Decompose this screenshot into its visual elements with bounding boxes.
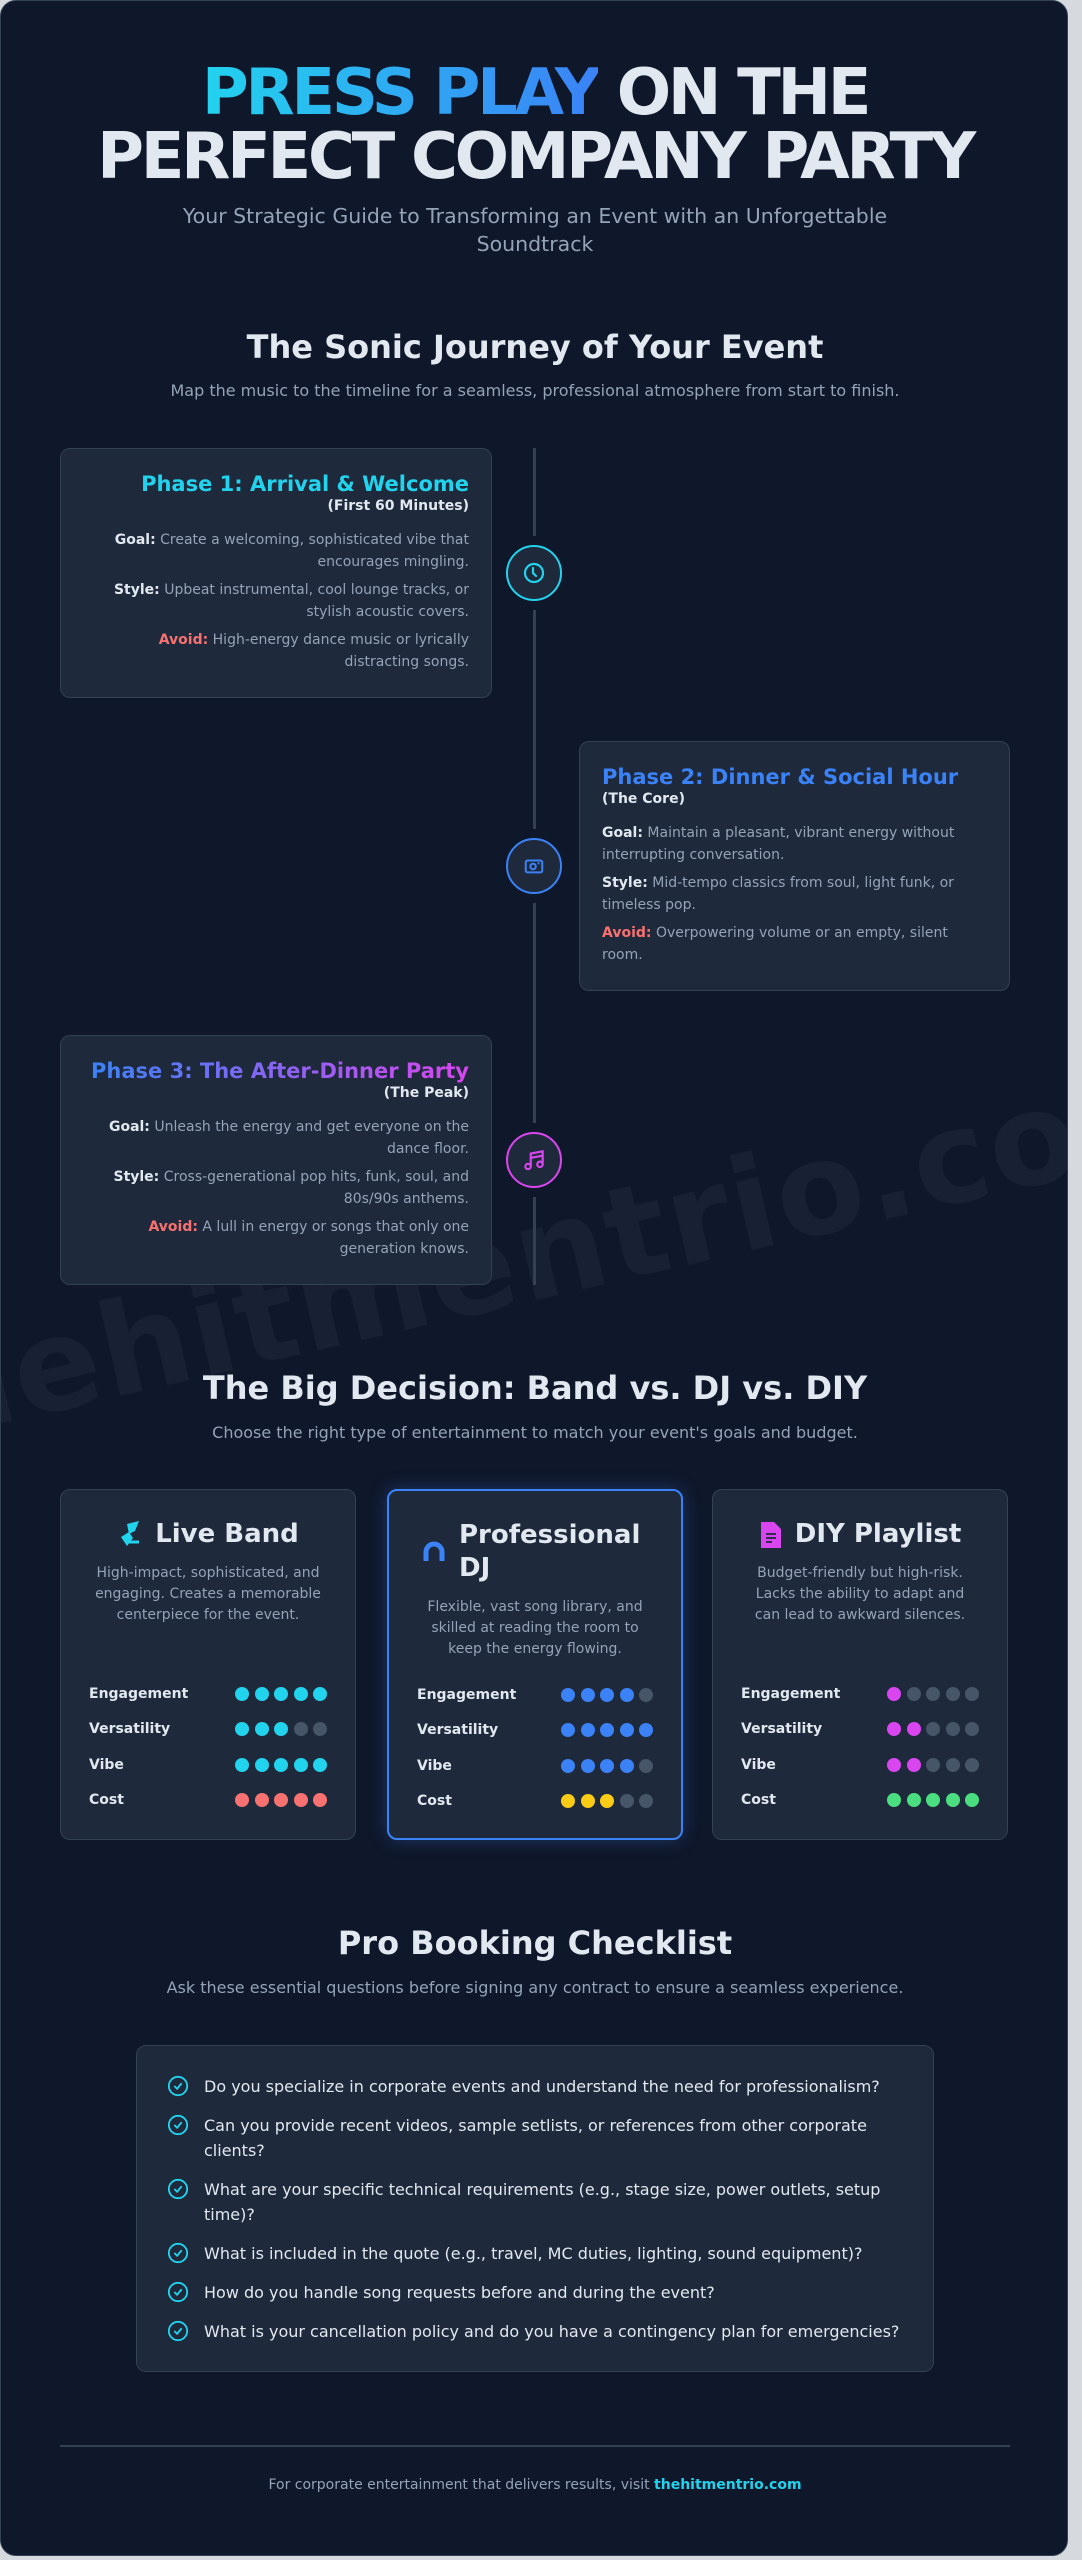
heading: big decision: The Big Decision: Band vs. DJ vs. DIY (203, 1369, 867, 1407)
ratings: live band: Cost (89, 1792, 124, 1808)
panel: checklist: Do you specialize in corporate events and understand the need for professionalism? (204, 2077, 880, 2096)
ratings: diy: Engagement (741, 1686, 840, 1702)
panel: phase 3: Style: Cross-generational pop hits, funk, soul, and 80s/90s anthems. (113, 1169, 469, 1207)
icon: camera (506, 838, 562, 894)
panel: checklist: What are your specific technical requirements (e.g., stage size, power outlets, setup time)? (204, 2180, 880, 2224)
icon: music note (506, 1132, 562, 1188)
ratings: live band: Versatility (89, 1721, 170, 1737)
panel: phase 1: Goal: Create a welcoming, sophisticated vibe that encourages mingling. (115, 532, 469, 570)
footer: For corporate entertainment that delivers results, visit thehitmentrio.com (268, 2477, 802, 2493)
panel: diy playlist: Budget-friendly but high-risk. Lacks the ability to adapt and can lead to awkward silences. (755, 1565, 965, 1623)
panel: phase 1 (60, 448, 492, 698)
panel: live band: High-impact, sophisticated, and engaging. Creates a memorable centerpiece for the event. (95, 1565, 321, 1623)
heading: live band: Live Band (155, 1519, 299, 1549)
subtitle: Your Strategic Guide to Transforming an Event with an Unforgettable Soundtrack (183, 204, 887, 256)
icon: clock (506, 545, 562, 601)
panel: phase 2: Avoid: Overpowering volume or an empty, silent room. (602, 925, 948, 963)
ratings: diy: Versatility (741, 1721, 822, 1737)
panel: phase 3: Avoid: A lull in energy or songs that only one generation knows. (148, 1219, 469, 1257)
heading: diy: DIY Playlist (795, 1519, 961, 1549)
panel: professional dj: Flexible, vast song library, and skilled at reading the room to keep the energy flowing. (427, 1599, 643, 1657)
ratings: dj: Versatility (417, 1722, 498, 1738)
heading: checklist: Pro Booking Checklist (338, 1924, 732, 1962)
ratings: live band (89, 1686, 327, 1808)
title: PRESS PLAY ON THE (202, 56, 868, 130)
panel: phase 1: Avoid: High-energy dance music or lyrically distracting songs. (159, 632, 469, 670)
ratings: live band: Vibe (89, 1757, 124, 1773)
heading: dj: Professional DJ (459, 1520, 640, 1583)
panel: phase 3: (The Peak) (384, 1085, 469, 1101)
panel: phase 2: Style: Mid-tempo classics from soul, light funk, or timeless pop. (602, 875, 954, 913)
ratings: dj: Cost (417, 1793, 452, 1809)
panel: phase 1: (First 60 Minutes) (327, 498, 469, 514)
ratings: diy (741, 1686, 979, 1808)
ratings: diy: Cost (741, 1792, 776, 1808)
panel: checklist: What is your cancellation policy and do you have a contingency plan for emergencies? (204, 2322, 899, 2341)
heading: sonic journey: The Sonic Journey of Your Event (247, 328, 823, 366)
subheading: big decision: Choose the right type of entertainment to match your event's goals and budget. (212, 1423, 858, 1442)
panel: phase 3: Phase 3: The After-Dinner Party (91, 1059, 469, 1083)
panel: phase 3: Goal: Unleash the energy and get everyone on the dance floor. (109, 1119, 469, 1157)
ratings: dj: Vibe (417, 1758, 452, 1774)
panel: phase 2: Phase 2: Dinner & Social Hour (602, 765, 958, 789)
panel: live band (60, 1489, 356, 1840)
panel: professional dj (387, 1489, 683, 1840)
title (97, 56, 977, 194)
panel: checklist (136, 2045, 934, 2372)
timeline line (533, 448, 536, 1285)
panel: phase 2: (The Core) (602, 791, 685, 807)
title: PERFECT COMPANY PARTY (97, 120, 973, 194)
panel: phase 3 (60, 1035, 492, 1285)
panel: checklist: Can you provide recent videos, sample setlists, or references from other corporate clients? (204, 2116, 867, 2160)
ratings: live band: Engagement (89, 1686, 188, 1702)
ratings: diy: Vibe (741, 1757, 776, 1773)
panel: phase 1: Phase 1: Arrival & Welcome (141, 472, 469, 496)
panel: checklist: What is included in the quote (e.g., travel, MC duties, lighting, sound equipment)? (204, 2244, 862, 2263)
panel: diy playlist (712, 1489, 1008, 1840)
ratings: dj (417, 1687, 653, 1809)
panel: phase 2: Goal: Maintain a pleasant, vibrant energy without interrupting conversation. (602, 825, 954, 863)
panel: phase 2 (579, 741, 1010, 991)
subheading: checklist: Ask these essential questions before signing any contract to ensure a seamless experience. (167, 1978, 903, 1997)
panel: phase 1: Style: Upbeat instrumental, cool lounge tracks, or stylish acoustic covers. (114, 582, 469, 620)
panel: checklist: How do you handle song requests before and during the event? (204, 2283, 715, 2302)
ratings: dj: Engagement (417, 1687, 516, 1703)
subheading: sonic journey: Map the music to the timeline for a seamless, professional atmosphere from start to finish. (170, 381, 900, 400)
